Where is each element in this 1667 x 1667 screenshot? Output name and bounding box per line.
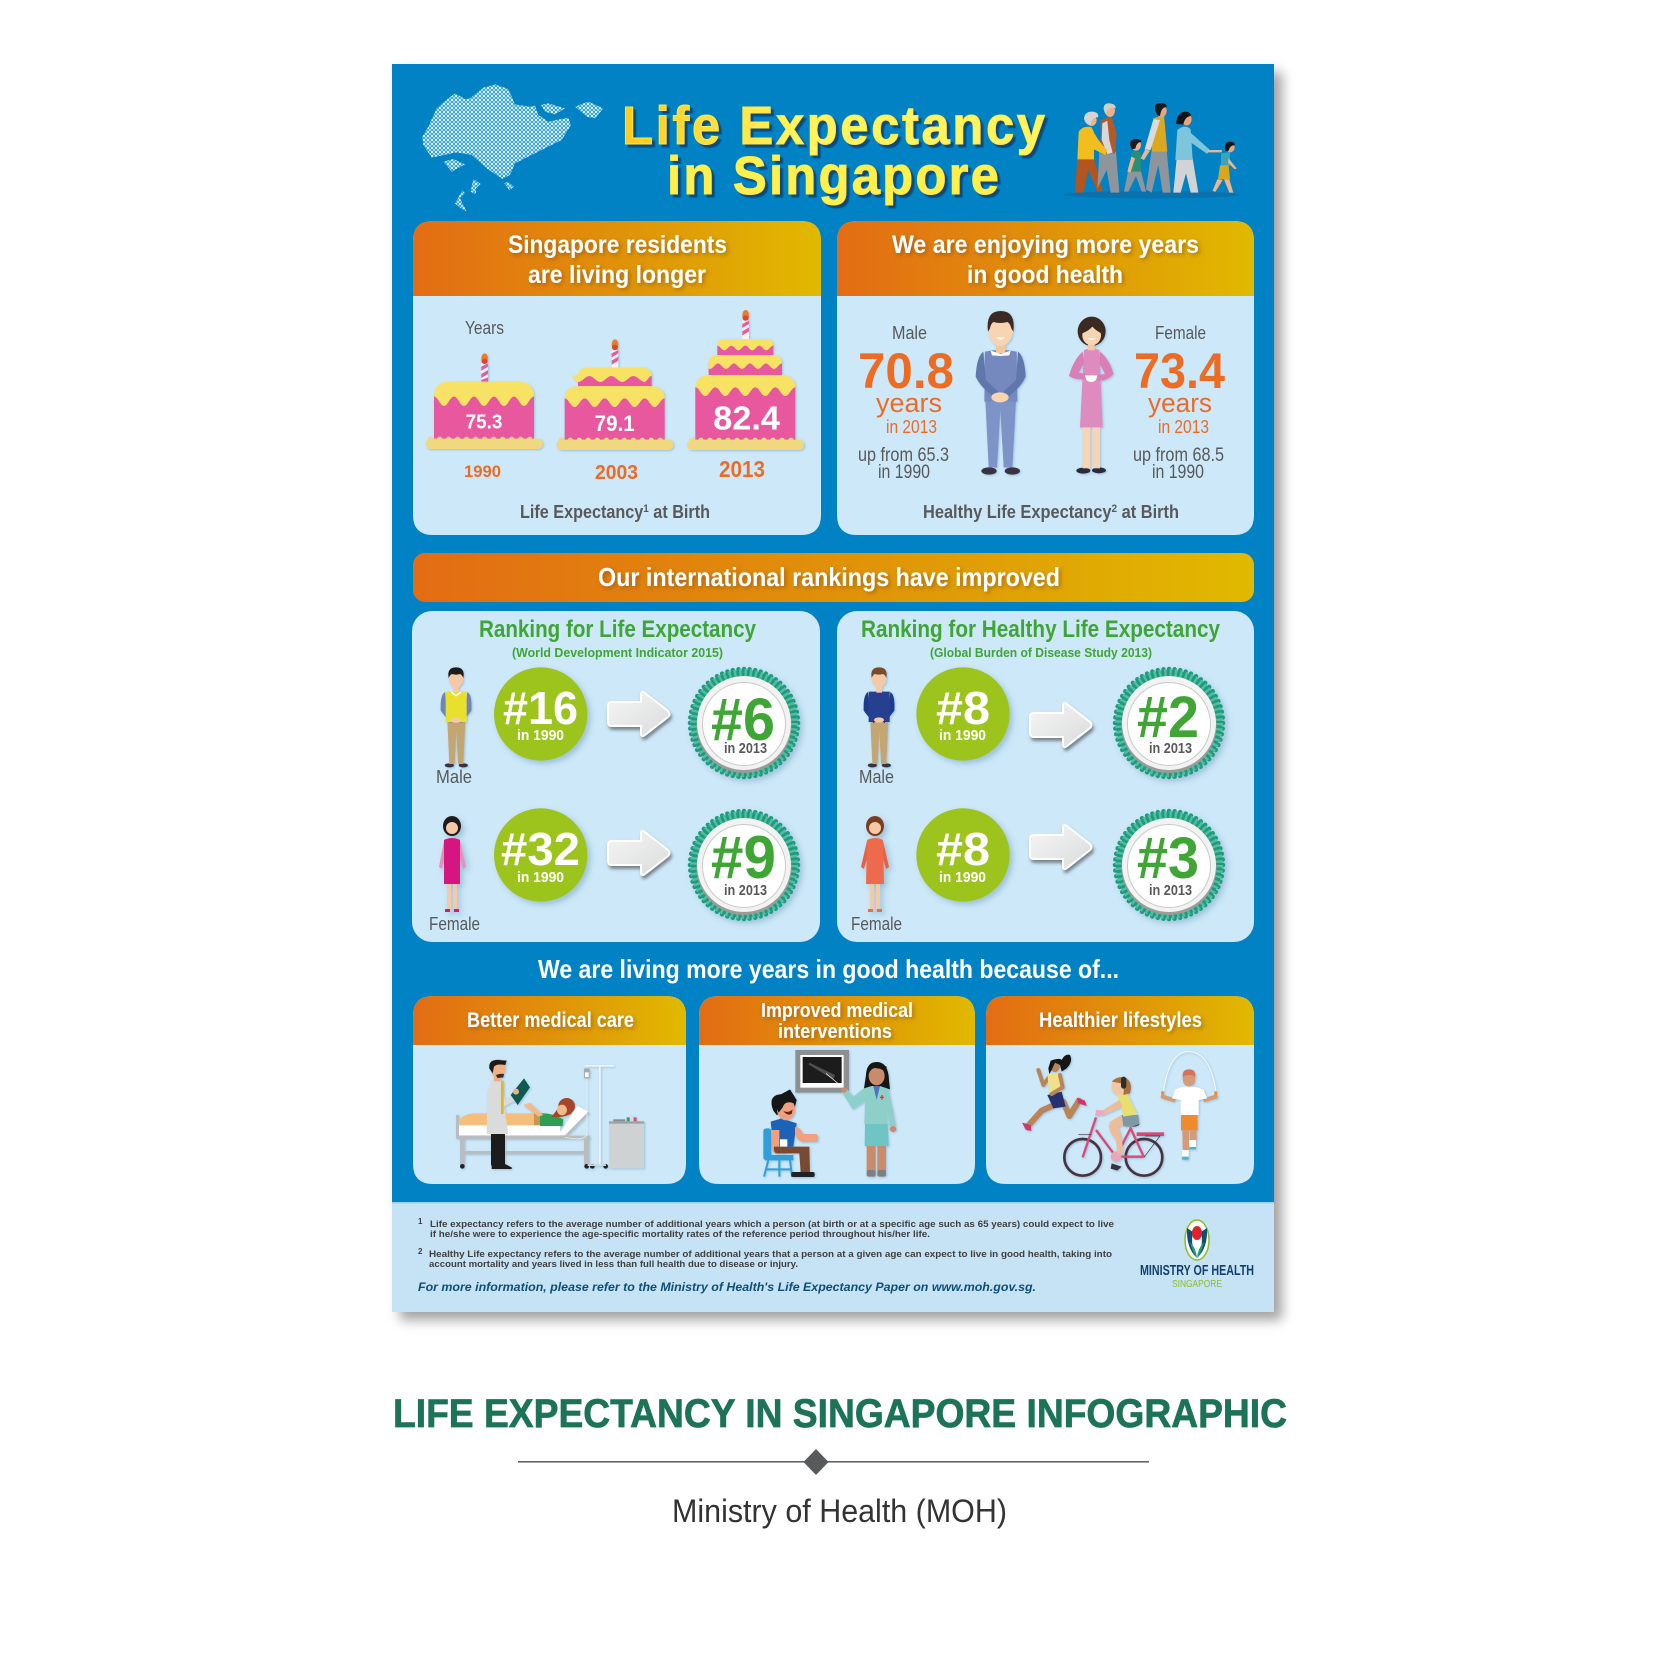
badge: rank 2013 male: #6 (711, 686, 775, 753)
label: male: Male (859, 767, 894, 787)
footnote 1: 1 (418, 1217, 423, 1226)
badge: rank 2013 male (1115, 669, 1223, 777)
source note: (World Development Indicator 2015) (512, 645, 723, 660)
title: in Singapore (667, 147, 999, 206)
heading (761, 1000, 913, 1043)
female healthy life expectancy (1133, 323, 1225, 483)
rank 1990 male (494, 667, 587, 761)
badge: rank 2013 female: #3 (1137, 826, 1199, 891)
illustration: runner, cyclist and rope skipper (1022, 1052, 1217, 1176)
logo: ministry of health (1140, 1220, 1254, 1290)
footnote 2: 2 (418, 1247, 423, 1256)
female healthy life expectancy: 73.4 (1134, 343, 1225, 399)
male healthy life expectancy: years (876, 388, 942, 418)
caption: life expectancy at birth: 1 (643, 503, 649, 515)
heading: ranking life expectancy: Ranking for Life Expectancy (479, 616, 757, 643)
illustration: three-generation family (1063, 103, 1240, 198)
heading: interventions (778, 1021, 892, 1043)
rank 1990 female: #8 (936, 823, 990, 875)
male healthy life expectancy (858, 323, 954, 483)
illustration: doctor showing x-ray to patient (763, 1050, 896, 1177)
female healthy life expectancy: up from 68.5 (1133, 445, 1224, 466)
badge: rank 2013 male: in 2013 (724, 740, 767, 757)
caption source: Ministry of Health (MOH) (672, 1493, 1007, 1529)
rank 1990 female: in 1990 (939, 869, 986, 886)
heading: Better medical care (467, 1009, 634, 1032)
heading: good health: in good health (967, 261, 1123, 289)
divider with diamond (518, 1449, 1149, 1475)
figure: female (861, 816, 889, 912)
rank 1990 male: in 1990 (939, 727, 986, 744)
panel: healthier lifestyles (986, 996, 1254, 1184)
icon: cake 2013: 82.4 (713, 400, 780, 437)
heading: because of: We are living more years in good health because of... (538, 954, 1119, 984)
icon: cake 1990: 75.3 (466, 410, 502, 433)
year labels: 2003 (595, 462, 638, 484)
panel: good health (837, 221, 1254, 535)
badge: rank 2013 male: in 2013 (1149, 740, 1192, 757)
icon: dotted map of Singapore (422, 84, 603, 212)
label: female: Female (429, 914, 480, 934)
illustration: woman (1069, 317, 1113, 474)
footnote 1: if he/she were to experience the age-specific mortality rates of the reference period throughout his/her life. (430, 1229, 930, 1240)
figure: female (439, 816, 466, 912)
heading: Improved medical (761, 1000, 913, 1022)
female healthy life expectancy: in 1990 (1152, 462, 1204, 483)
footer panel (392, 1202, 1274, 1312)
rank 1990 male: #16 (503, 682, 578, 734)
male healthy life expectancy: in 2013 (886, 417, 937, 437)
illustration: doctor and patient in bed (456, 1059, 644, 1169)
banner: international rankings (413, 553, 1254, 602)
caption: healthy life expectancy at birth: 2 (1112, 503, 1117, 515)
illustration: man (976, 311, 1026, 475)
footnote 2: Healthy Life expectancy refers to the average number of additional years that a person at a given age can expect to live in good health, taking into (429, 1249, 1112, 1260)
rank 1990 male (916, 667, 1010, 761)
poster shadow (400, 72, 1282, 1320)
label: female: Female (851, 914, 902, 934)
icon: cake 2013 (687, 310, 804, 450)
female healthy life expectancy: Female (1155, 323, 1206, 343)
heading: living longer (508, 231, 727, 289)
banner: international rankings: Our international rankings have improved (598, 562, 1060, 592)
rank 1990 female (494, 808, 587, 902)
panel: better medical care (413, 996, 686, 1184)
panel: improved medical interventions (699, 996, 975, 1184)
panel: ranking for healthy life expectancy (837, 611, 1254, 942)
year labels: 2013 (719, 456, 765, 482)
male healthy life expectancy: up from 65.3 (858, 445, 949, 466)
arrow (1030, 703, 1092, 747)
icon: cake 1990 (426, 353, 543, 449)
male healthy life expectancy: in 1990 (878, 462, 930, 483)
poster background (392, 64, 1274, 1312)
caption: healthy life expectancy at birth: at Birth (1117, 502, 1179, 522)
badge: rank 2013 male: #2 (1137, 685, 1199, 750)
figure: male (864, 667, 894, 767)
figure: male (441, 667, 471, 767)
rank 1990 female: #32 (501, 823, 580, 875)
heading: ranking healthy life expectancy: Ranking for Healthy Life Expectancy (861, 616, 1221, 643)
badge: rank 2013 female (690, 811, 798, 919)
footnote 2 (418, 1247, 1112, 1270)
more information note: For more information, please refer to the Ministry of Health's Life Expectancy Paper on www.moh.gov.sg. (418, 1282, 1036, 1294)
logo: ministry of health: MINISTRY OF HEALTH (1140, 1262, 1254, 1279)
rank 1990 male: in 1990 (517, 727, 564, 744)
arrow (608, 692, 670, 736)
badge: rank 2013 female (1115, 811, 1223, 919)
heading: good health (892, 231, 1199, 289)
label: years: Years (465, 318, 504, 338)
heading: Healthier lifestyles (1039, 1009, 1202, 1032)
footnote 1 (418, 1217, 1114, 1240)
year labels: 1990 (464, 462, 501, 481)
female healthy life expectancy: in 2013 (1158, 417, 1209, 437)
rank 1990 female (916, 808, 1010, 902)
heading: good health: We are enjoying more years (892, 231, 1199, 259)
caption: life expectancy at birth: at Birth (649, 502, 710, 522)
footnote 1: Life expectancy refers to the average number of additional years which a person (at birth or at a specific age such as 65 years) could expect to live (430, 1219, 1114, 1230)
badge: rank 2013 female: in 2013 (1149, 882, 1192, 899)
male healthy life expectancy: 70.8 (858, 343, 954, 399)
caption: life expectancy at birth: Life Expectancy (520, 502, 657, 522)
rank 1990 female: in 1990 (517, 869, 564, 886)
male healthy life expectancy: Male (892, 323, 927, 343)
title (622, 97, 1045, 206)
panel: ranking for life expectancy (412, 611, 820, 942)
year labels (464, 456, 765, 484)
icon: cake 2003: 79.1 (595, 411, 635, 436)
caption: healthy life expectancy at birth: Healthy Life Expectancy (923, 502, 1130, 522)
title: Life Expectancy (622, 97, 1045, 156)
badge: rank 2013 male (690, 669, 798, 777)
logo: ministry of health: SINGAPORE (1172, 1279, 1222, 1290)
badge: rank 2013 female: in 2013 (724, 882, 767, 899)
heading: living longer: are living longer (528, 261, 706, 289)
footnote 2: account mortality and years lived in less than full health due to disease or injury. (429, 1259, 798, 1270)
arrow (608, 831, 670, 875)
icon: cake 2003 (557, 339, 673, 450)
badge: rank 2013 female: #9 (711, 824, 776, 891)
arrow (1030, 825, 1092, 869)
rank 1990 male: #8 (936, 682, 990, 734)
heading: living longer: Singapore residents (508, 231, 727, 259)
panel: living longer (413, 221, 821, 535)
female healthy life expectancy: years (1148, 388, 1212, 418)
source note: (Global Burden of Disease Study 2013) (930, 645, 1152, 660)
label: male: Male (436, 767, 472, 787)
caption title: LIFE EXPECTANCY IN SINGAPORE INFOGRAPHIC (393, 1392, 1287, 1436)
